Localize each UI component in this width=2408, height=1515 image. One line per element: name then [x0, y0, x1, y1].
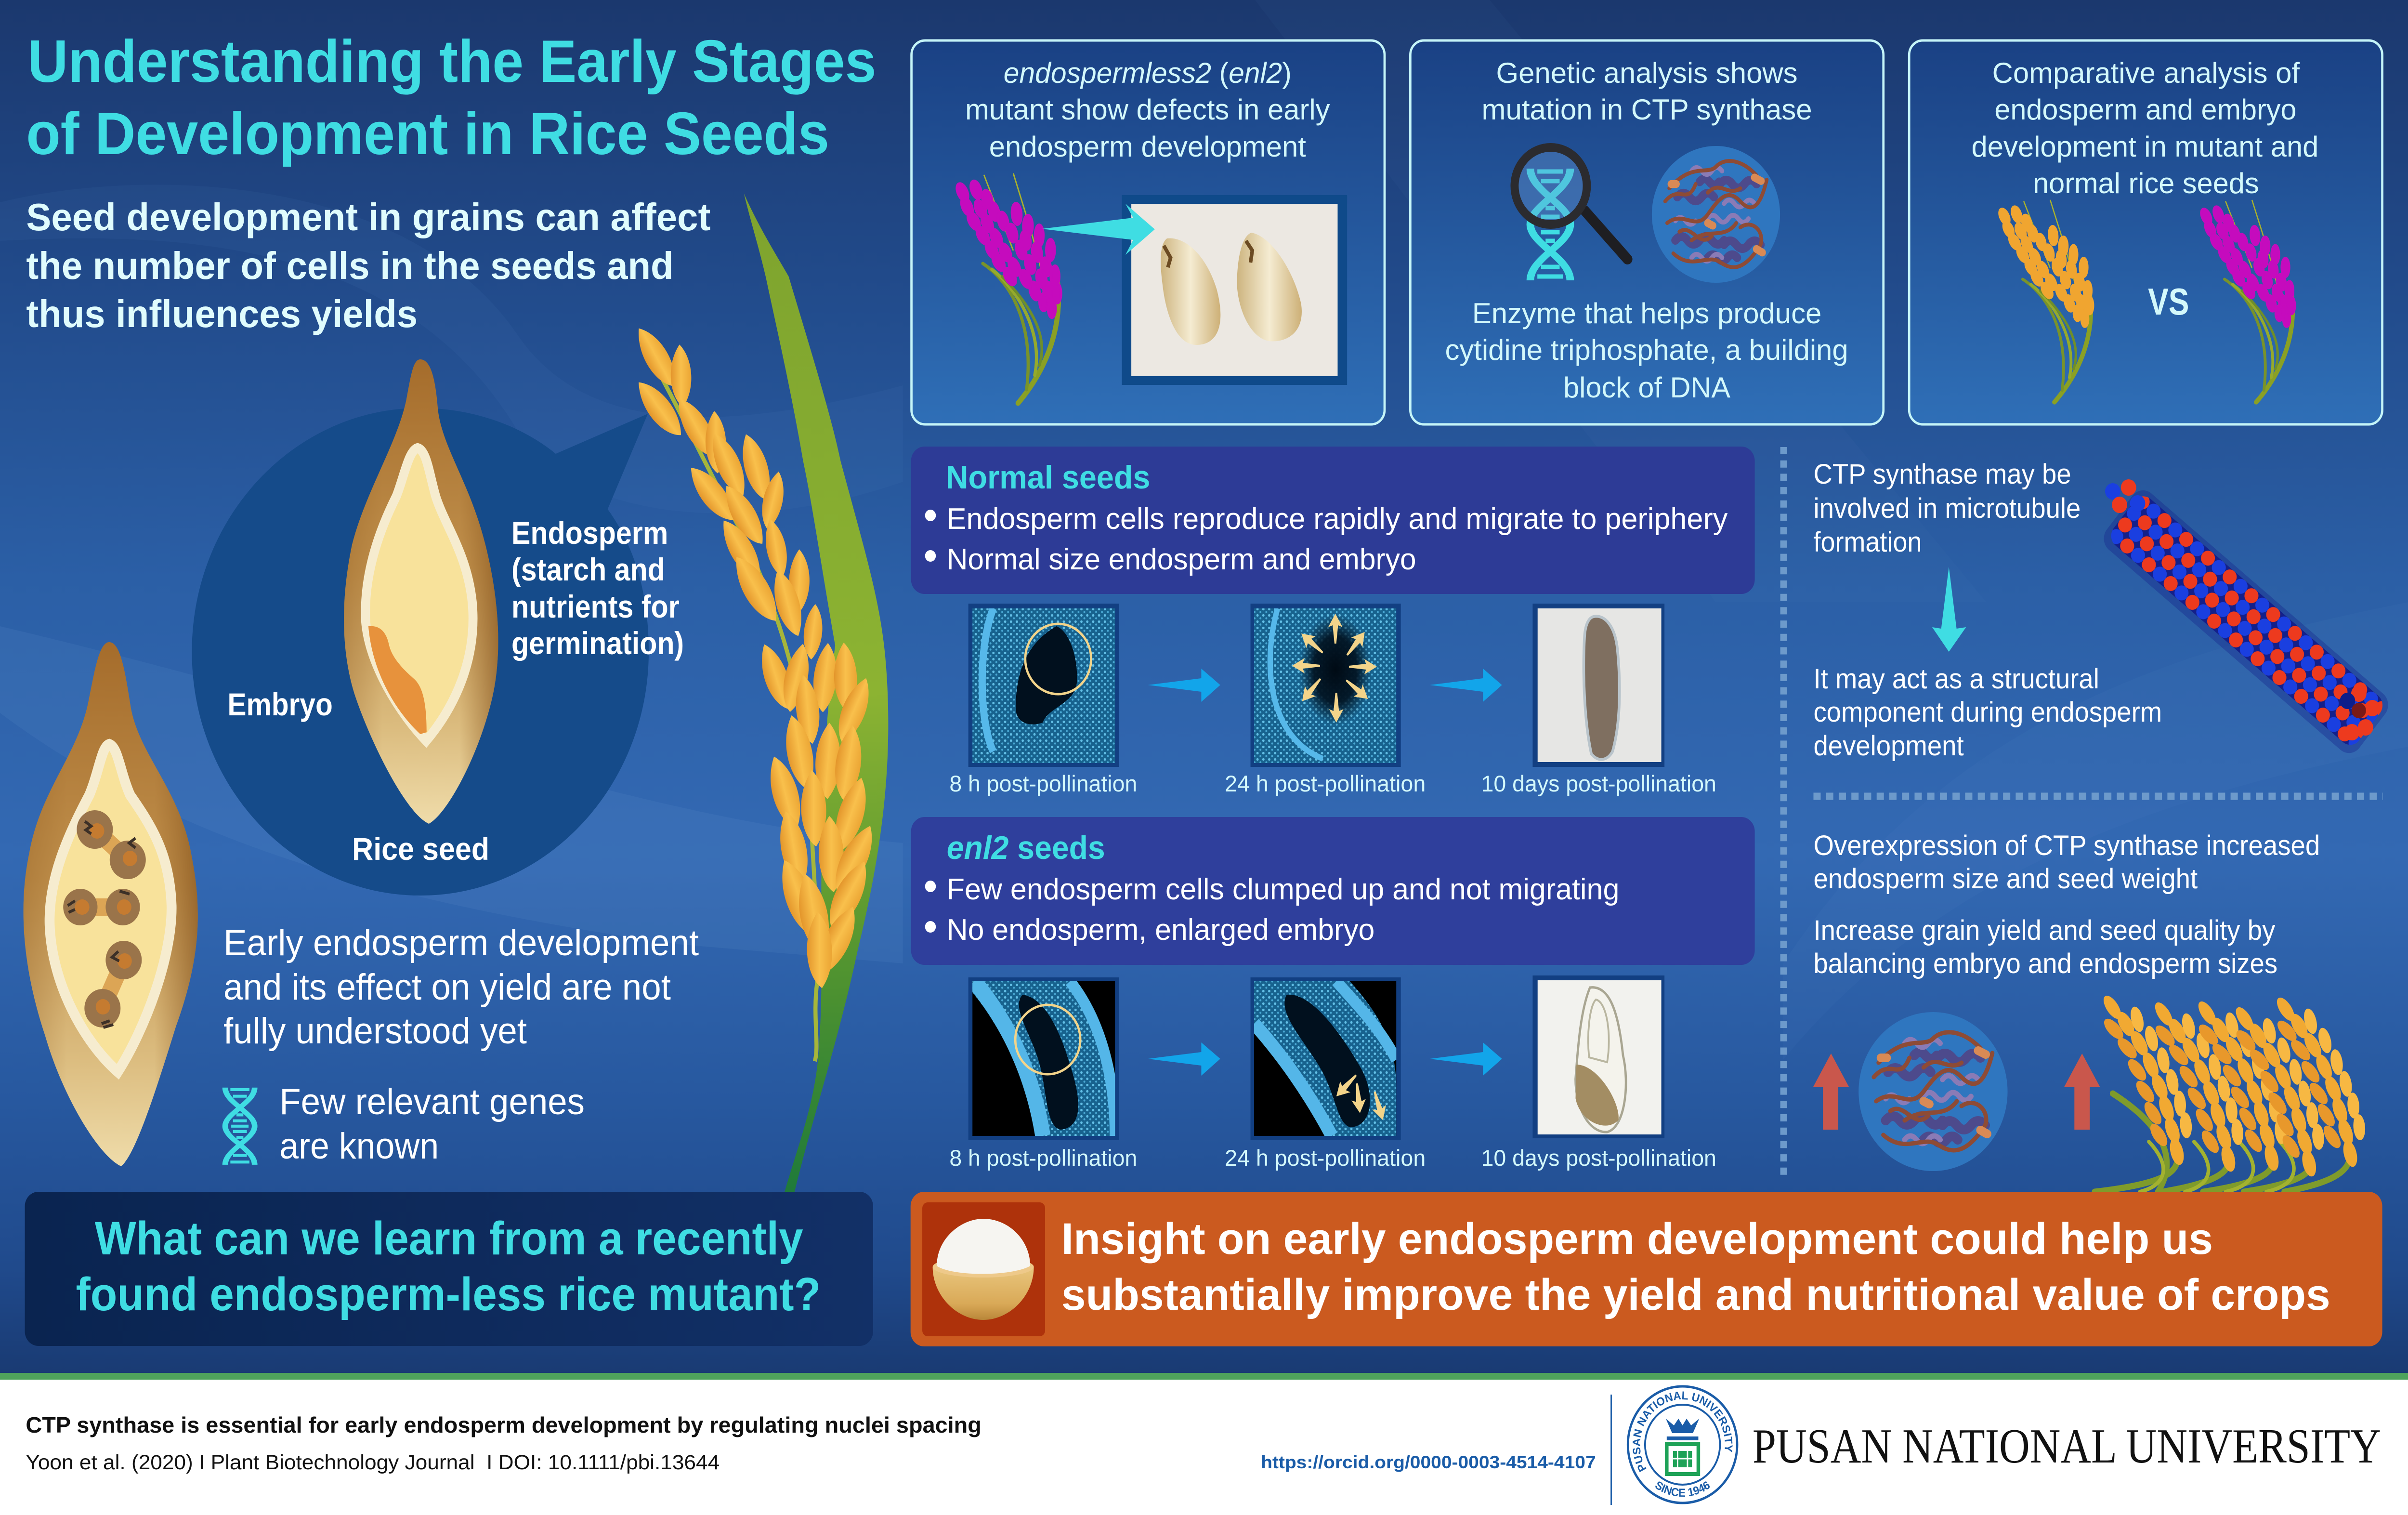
panel: normal seeds: Endosperm cells reproduce rapidly and migrate to periphery — [947, 502, 1727, 535]
text: microtubule: involved in microtubule — [1813, 492, 2081, 524]
panel 1 text: endospermless2 (enl2) — [1004, 57, 1292, 89]
arrows: limited migration — [1331, 1070, 1390, 1122]
text: overexpression — [1813, 830, 2320, 894]
micrograph: enl2 8 h — [968, 977, 1119, 1140]
rice panicle — [630, 321, 883, 1061]
panel 2 heading: Genetic analysis shows — [1496, 57, 1798, 89]
captions: normal — [949, 771, 1716, 796]
panel 2 enzyme text: Enzyme that helps produce — [1472, 297, 1821, 329]
panel: normal seeds: Normal size endosperm and embryo — [947, 542, 1416, 576]
icon: CTP synthase protein — [1652, 146, 1780, 283]
panel: normal seeds: Normal seeds — [946, 459, 1150, 495]
text: early endosperm development: and its effect on yield are not — [223, 966, 671, 1008]
panel 2 heading: mutation in CTP synthase — [1481, 93, 1812, 126]
leaf — [744, 194, 888, 1192]
text: overexpression: endosperm size and seed weight — [1813, 863, 2198, 894]
icon: rice field — [2094, 993, 2366, 1192]
arrow — [1430, 669, 1502, 702]
insight banner — [911, 1192, 2382, 1346]
text: microtubule — [1813, 458, 2081, 557]
captions: normal: 24 h post-pollination — [1225, 771, 1426, 796]
panel 3 text — [1972, 57, 2318, 199]
panel 1 text: endosperm development — [989, 131, 1306, 163]
panel: enl2 seeds: No endosperm, enlarged embryo — [947, 913, 1374, 946]
micrograph: normal 24 h — [1251, 604, 1401, 767]
panel 2 enzyme text: cytidine triphosphate, a building — [1445, 334, 1848, 366]
arrow — [1430, 1042, 1502, 1076]
icon: DNA — [225, 1088, 255, 1165]
micrograph: enl2 24 h — [1251, 977, 1401, 1140]
text: grain yield — [1813, 914, 2277, 979]
subtitle — [26, 196, 710, 336]
text: few relevant genes: Few relevant genes — [279, 1081, 585, 1122]
text: grain yield: balancing embryo and endosperm sizes — [1813, 948, 2277, 979]
text: microtubule: formation — [1813, 526, 1922, 557]
captions: normal: 10 days post-pollination — [1481, 771, 1716, 796]
label: endosperm: nutrients for — [511, 589, 680, 624]
label: vs: VS — [2148, 281, 2189, 323]
panel 2 enzyme text — [1445, 297, 1848, 404]
text: overexpression: Overexpression of CTP synthase increased — [1813, 830, 2320, 861]
label: rice seed: Rice seed — [352, 831, 489, 867]
footer bar — [0, 1373, 2408, 1515]
insight text — [1061, 1213, 2330, 1319]
text: few relevant genes — [279, 1081, 585, 1167]
icon: DNA under magnifier — [1515, 147, 1627, 280]
icon: rice seed cross-section — [344, 359, 498, 824]
panel 3 text: endosperm and embryo — [1994, 93, 2296, 126]
logo: university seal: PUSAN NATIONAL UNIVERSITY — [1633, 1391, 1733, 1472]
panel 1 text: mutant show defects in early — [965, 93, 1330, 126]
insight text: substantially improve the yield and nutritional value of crops — [1061, 1269, 2330, 1319]
icon: purple rice plant — [955, 174, 1061, 403]
panel: enl2 seeds: enl2 seeds — [947, 829, 1105, 866]
text: structural component: component during endosperm — [1813, 696, 2162, 727]
label: endosperm: (starch and — [511, 552, 665, 587]
label: endosperm — [511, 515, 684, 661]
label: endosperm: Endosperm — [511, 515, 668, 551]
logo: university seal — [1627, 1385, 1739, 1504]
arrow — [1148, 669, 1220, 702]
arrow: up, protein — [1813, 1054, 1849, 1130]
insight text: Insight on early endosperm development could help us — [1061, 1213, 2213, 1264]
title: Understanding the Early Stages — [27, 28, 876, 95]
callout bubble — [192, 408, 649, 896]
citation: CTP synthase is essential for early endosperm development by regulating nuclei spacing — [26, 1413, 982, 1437]
text: structural component: It may act as a structural — [1813, 663, 2099, 694]
text: early endosperm development: fully understood yet — [223, 1010, 527, 1052]
panel 2 heading — [1481, 57, 1812, 126]
arrow: up, yield — [2064, 1054, 2100, 1130]
question box — [25, 1192, 873, 1346]
icon: microtubule — [2098, 479, 2394, 759]
icon: mutant rice plant — [2199, 200, 2295, 402]
icon: normal rice plant — [1998, 200, 2093, 402]
panel: normal seeds — [911, 447, 1755, 594]
panel 3 text: development in mutant and — [1972, 131, 2318, 163]
subtitle: Seed development in grains can affect — [26, 196, 710, 239]
question box: What can we learn from a recently — [95, 1212, 803, 1265]
captions: normal: 8 h post-pollination — [949, 771, 1137, 796]
title — [26, 28, 876, 167]
photo: endosperm-less seeds — [1122, 195, 1347, 385]
panel: enl2 seeds — [911, 817, 1755, 965]
label: endosperm: germination) — [511, 625, 684, 661]
panel: enl2 seeds: Few endosperm cells clumped up and not migrating — [947, 872, 1619, 906]
arrow: to photo — [1042, 204, 1155, 255]
captions: enl2: 24 h post-pollination — [1225, 1146, 1426, 1171]
citation — [26, 1413, 982, 1474]
captions: enl2 — [949, 1146, 1716, 1171]
arrow: down — [1932, 567, 1966, 652]
citation: Yoon et al. (2020) I Plant Biotechnology Journal I DOI: 10.1111/pbi.13644 — [26, 1450, 720, 1474]
micrograph: normal 10 days — [1532, 604, 1664, 767]
arrow — [1148, 1042, 1220, 1076]
question box: found endosperm-less rice mutant? — [76, 1268, 821, 1320]
text: microtubule: CTP synthase may be — [1813, 458, 2071, 489]
text: few relevant genes: are known — [279, 1125, 439, 1167]
panel 3 text: normal rice seeds — [2033, 167, 2259, 199]
label: embryo: Embryo — [227, 686, 333, 722]
subtitle: thus influences yields — [26, 293, 418, 336]
panel 3 text: Comparative analysis of — [1992, 57, 2300, 89]
icon: rice bowl — [922, 1202, 1045, 1336]
captions: enl2: 8 h post-pollination — [949, 1146, 1137, 1171]
logo: university seal: SINCE 1946 — [1655, 1481, 1710, 1497]
captions: enl2: 10 days post-pollination — [1481, 1146, 1716, 1171]
link: https://orcid.org/0000-0003-4514-4107 — [1261, 1452, 1596, 1472]
panel: genetic analysis — [1410, 40, 1884, 424]
icon: protein — [1858, 1012, 2008, 1171]
text: structural component: development — [1813, 730, 1964, 761]
panel: endospermless2 mutant — [912, 40, 1385, 424]
text: early endosperm development — [223, 922, 699, 1052]
panel: comparative analysis — [1909, 40, 2382, 424]
arrows: migration — [1292, 614, 1377, 723]
text: early endosperm development: Early endosperm development — [223, 922, 699, 963]
text: structural component — [1813, 663, 2162, 761]
text: grain yield: Increase grain yield and seed quality by — [1813, 914, 2275, 946]
panel 1 text — [965, 57, 1330, 163]
title: of Development in Rice Seeds — [26, 101, 829, 167]
subtitle: the number of cells in the seeds and — [26, 245, 674, 288]
panel 2 enzyme text: block of DNA — [1563, 371, 1730, 404]
micrograph: normal 8 h — [968, 604, 1119, 767]
micrograph: enl2 10 days — [1532, 975, 1664, 1138]
icon: seed with dividing cells — [24, 642, 198, 1166]
